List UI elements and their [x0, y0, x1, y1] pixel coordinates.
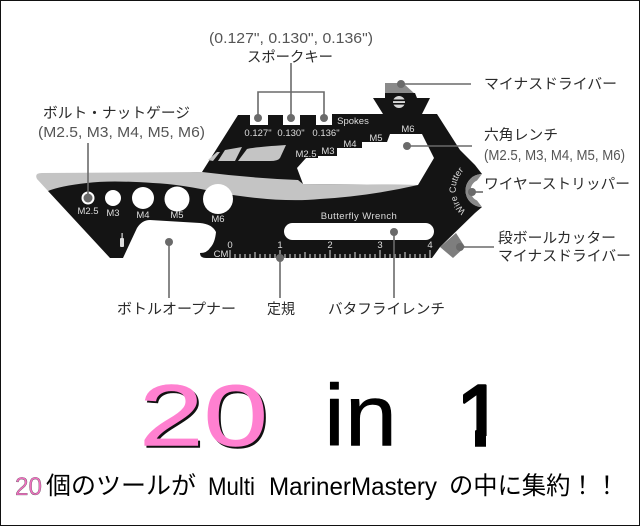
- headline: 20 in 1: 20: [141, 370, 270, 466]
- tool engraved labels: 3: [377, 240, 383, 251]
- label: flat screwdriver 2: マイナスドライバー: [498, 249, 631, 265]
- label: hex sizes: (M2.5, M3, M4, M5, M6): [484, 147, 625, 164]
- callout leader lines: [88, 63, 494, 298]
- grey hull band: [36, 172, 418, 200]
- tool engraved labels: M6: [211, 214, 225, 225]
- tool engraved labels: 0.127": [244, 128, 272, 139]
- tool engraved labels: M4: [136, 210, 150, 221]
- tool engraved labels: Spokes: [337, 116, 369, 127]
- label: bottle opener: ボトルオープナー: [117, 301, 236, 318]
- label: ruler: 定規: [267, 301, 295, 318]
- tool engraved labels: CM: [214, 249, 228, 260]
- subtitle: の中に集約！！: [449, 467, 619, 502]
- tool engraved labels: M3: [321, 146, 335, 157]
- label: wire stripper: ワイヤーストリッパー: [484, 176, 630, 193]
- tool engraved labels: 0.130": [277, 128, 305, 139]
- tool engraved labels: 0.136": [312, 128, 340, 139]
- tool engraved labels: Wire Cutter: [450, 167, 465, 216]
- label: flat screwdriver: マイナスドライバー: [484, 77, 617, 93]
- blade tip: [385, 83, 415, 94]
- cutter blade: [440, 233, 465, 258]
- tool engraved labels: M5: [170, 210, 184, 221]
- tool engraved labels: 2: [327, 240, 333, 251]
- butterfly wrench slot: [284, 223, 434, 240]
- callout dots: [84, 80, 476, 262]
- tool engraved labels: [77, 116, 465, 260]
- cabin windows: [208, 145, 286, 161]
- subtitle: Multi: [208, 473, 255, 501]
- tool engraved labels: M2.5: [295, 149, 317, 160]
- headline: 20 in 1: [139, 368, 506, 466]
- tool engraved labels: Butterfly Wrench: [321, 211, 397, 222]
- ruler ticks: [230, 250, 430, 258]
- label: bolt nut gauge: ボルト・ナットゲージ: [43, 105, 190, 122]
- headline: 20 in 1: 1: [456, 368, 504, 464]
- label: spoke key sizes: (0.127", 0.130", 0.136"): [209, 30, 373, 47]
- headline: 20 in 1: in: [324, 368, 397, 464]
- tool engraved labels: 1: [277, 240, 283, 251]
- subtitle: 個のツールが: [46, 467, 196, 502]
- subtitle: MarinerMastery: [269, 473, 437, 501]
- black tool body: [48, 93, 482, 258]
- multi-tool boat illustration: [36, 83, 482, 260]
- headline: 20 in 1: 20: [139, 368, 268, 464]
- tool engraved labels: M6: [401, 124, 415, 135]
- bottle icon: [120, 233, 124, 247]
- tool engraved labels: 0: [227, 240, 233, 251]
- hexagon wrench opening: [297, 134, 434, 185]
- tool engraved labels: M3: [106, 208, 120, 219]
- tool engraved labels: M5: [369, 133, 383, 144]
- screwdriver screw: [393, 96, 405, 108]
- gauge holes: [82, 184, 233, 214]
- tool engraved labels: 4: [427, 240, 433, 251]
- wire cutter ring: [466, 174, 482, 207]
- tool engraved labels: M4: [343, 139, 357, 150]
- tool engraved labels: M2.5: [77, 206, 99, 217]
- label: spoke key: スポークキー: [247, 49, 333, 66]
- subtitle: [15, 467, 619, 502]
- label: hex wrench: 六角レンチ: [484, 127, 558, 144]
- label: butterfly wrench: バタフライレンチ: [328, 301, 445, 318]
- label: box cutter: 段ボールカッター: [498, 230, 616, 247]
- label: gauge sizes: (M2.5, M3, M4, M5, M6): [38, 124, 205, 141]
- subtitle: 20: [15, 473, 42, 501]
